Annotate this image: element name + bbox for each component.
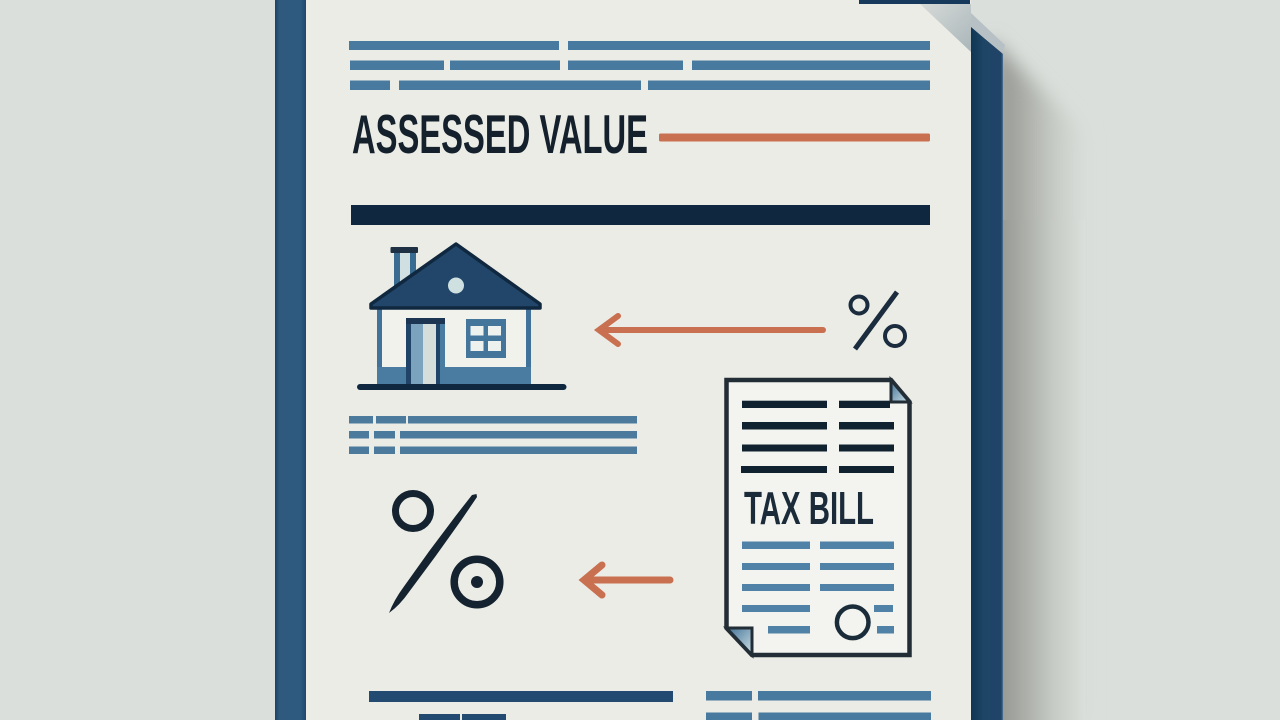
- percent bottom dot: [471, 576, 483, 588]
- bill bottom fold: [726, 628, 752, 655]
- value underline: [659, 134, 930, 142]
- attic window: [448, 278, 464, 294]
- footer lines left: [369, 691, 673, 720]
- heading: assessed value: ASSESSED VALUE: [352, 103, 648, 165]
- door: [406, 318, 445, 384]
- infographic canvas: [275, 0, 1074, 720]
- left document edge: [275, 0, 306, 720]
- folded page corner: [859, 0, 971, 52]
- arrow: percent to house: [599, 316, 823, 344]
- document page: [306, 0, 971, 720]
- document shadow: [990, 40, 1085, 720]
- icon: large percent: [389, 494, 500, 613]
- house walls: [377, 308, 531, 384]
- section divider bar: [351, 205, 930, 225]
- icon: small percent: [850, 292, 905, 349]
- bill top fold: [891, 380, 910, 402]
- heading: tax bill: TAX BILL: [744, 482, 874, 534]
- icon: tax bill document: [726, 380, 910, 655]
- intro text lines: [349, 41, 930, 90]
- bill header lines: [741, 401, 894, 473]
- roof: [371, 244, 540, 308]
- percent bottom ring: [454, 559, 500, 605]
- bill seal: [837, 606, 868, 638]
- footer lines right: [706, 691, 931, 720]
- bill body lines: [742, 542, 894, 634]
- bill sheet: [726, 380, 910, 655]
- arrow: bill to percent: [584, 565, 670, 595]
- right document edge: [971, 13, 1005, 720]
- percent slash: [389, 494, 477, 613]
- window: [466, 319, 506, 358]
- ground line: [357, 384, 566, 390]
- text lines under house: [349, 416, 637, 454]
- percent top ring: [396, 494, 430, 528]
- icon: house: [357, 244, 566, 390]
- chimney: [390, 247, 418, 287]
